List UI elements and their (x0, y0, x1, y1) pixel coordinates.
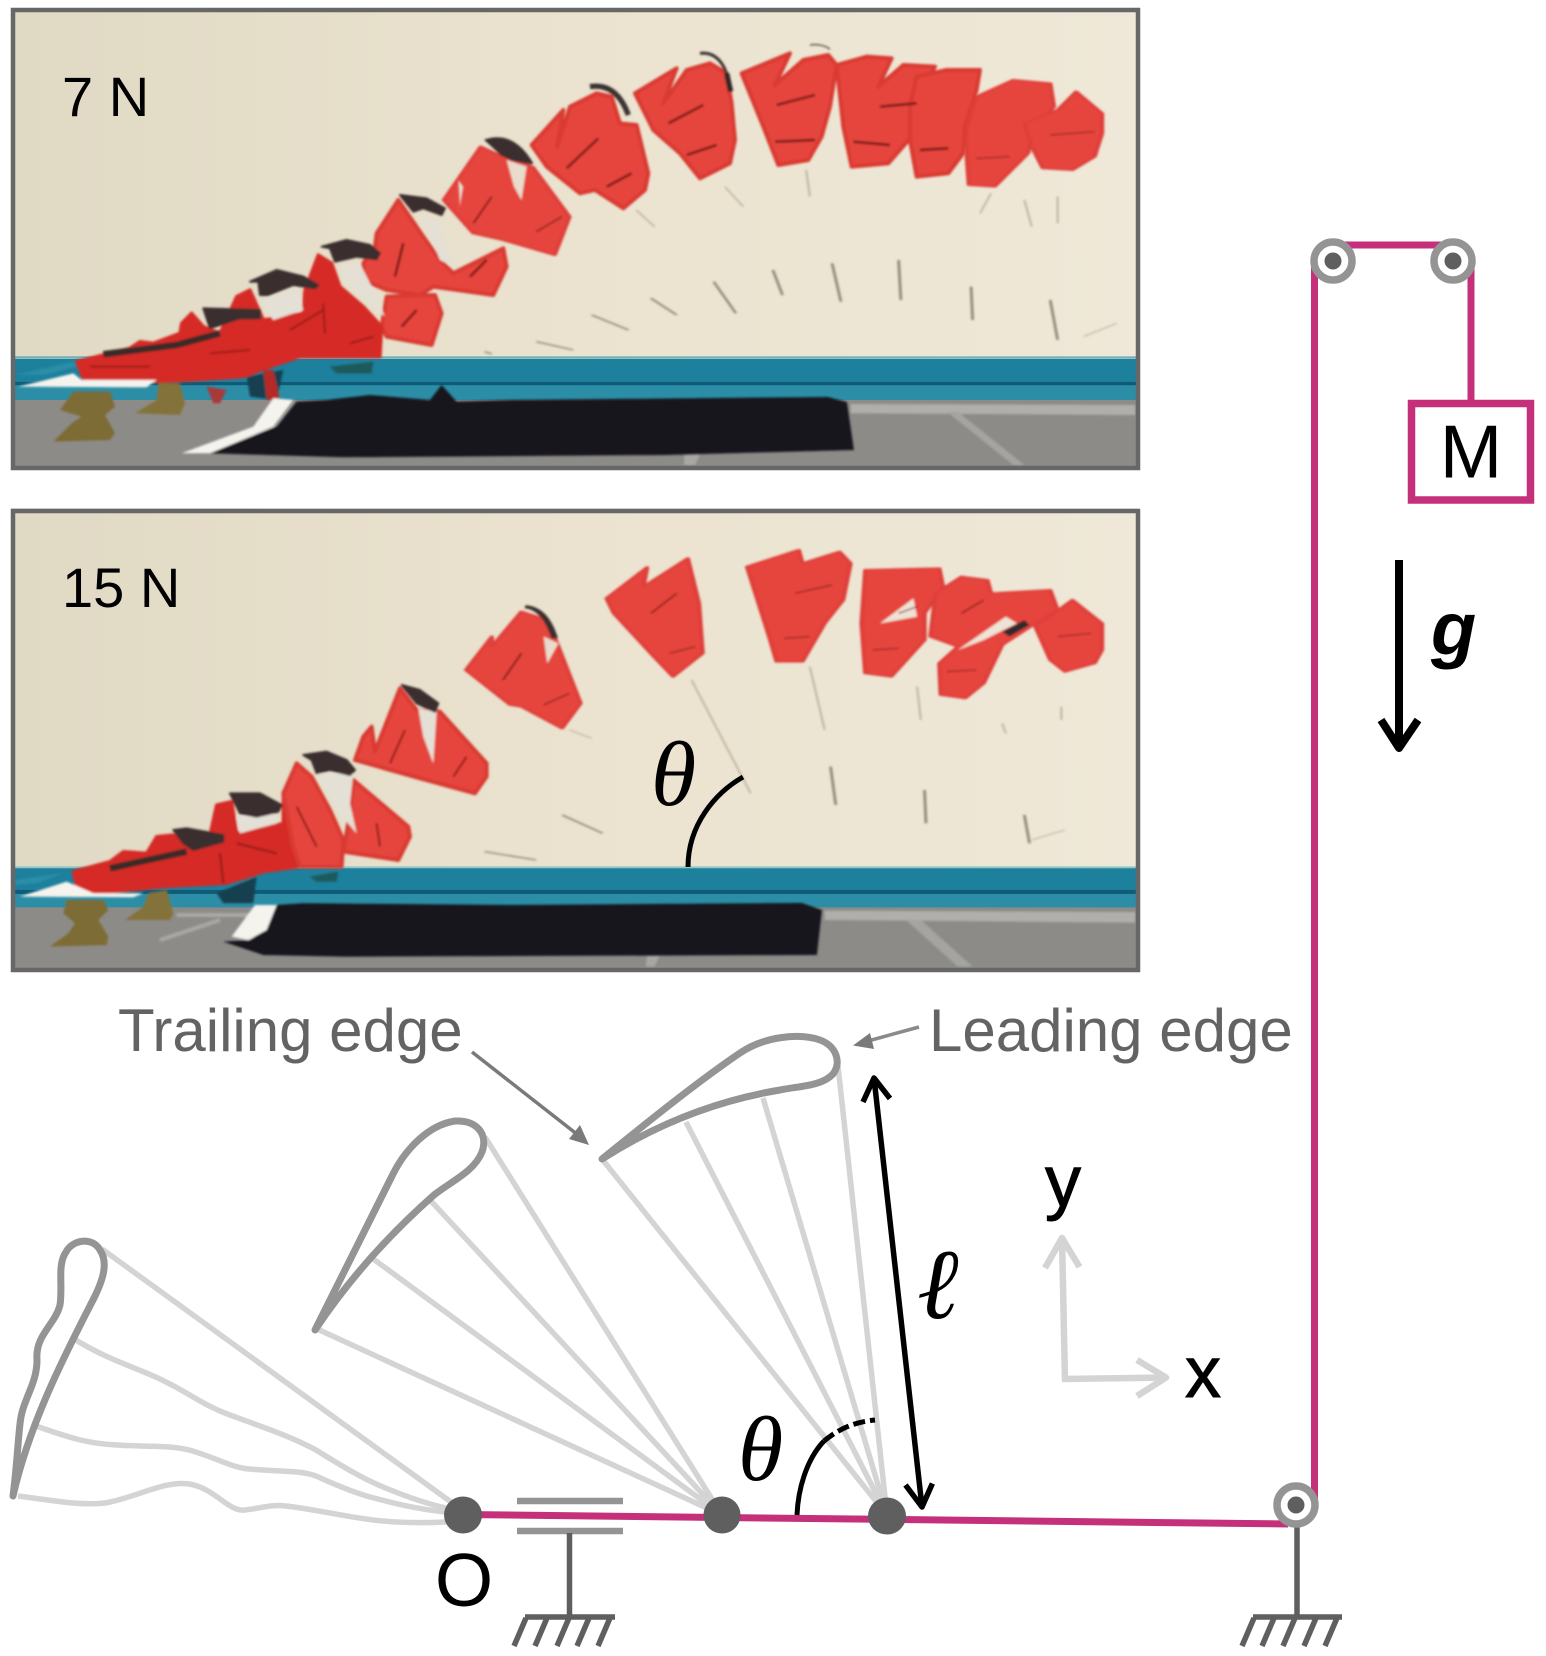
magenta beam (463, 1514, 1288, 1524)
wing pose 1: deformed (13, 1241, 451, 1523)
scribbles (503, 585, 1091, 705)
upper wings (532, 93, 648, 208)
gaps (317, 773, 357, 833)
label: gravity g: g (1430, 587, 1476, 670)
label: O: O (435, 1538, 493, 1622)
label: y axis: y (1045, 1142, 1081, 1222)
label: x axis: x (1185, 1333, 1221, 1413)
joint right (868, 1498, 906, 1534)
label: leading edge: Leading edge (929, 997, 1293, 1064)
far right wings (965, 80, 1054, 187)
angle arc on photo (688, 777, 743, 867)
angle arc (797, 1420, 875, 1515)
hats (303, 752, 355, 775)
streaks (484, 767, 1030, 860)
panel: 7 N photo (11, 8, 1139, 470)
wing pose 3 (602, 1036, 887, 1515)
mass box M (1412, 404, 1530, 500)
cloth (223, 903, 822, 957)
arrow: leading edge (853, 1027, 919, 1049)
axes arrows (1045, 1238, 1166, 1396)
pulley: top right (1434, 242, 1472, 280)
under wing shadows (217, 877, 257, 903)
wing 7 (355, 688, 487, 793)
wings (466, 612, 581, 728)
rods (160, 915, 250, 940)
red lines (395, 243, 487, 327)
wing pose 2 (315, 1121, 722, 1515)
lower wing cluster (77, 255, 382, 383)
mass box M: M (1440, 410, 1502, 494)
lower wing cluster (73, 763, 343, 893)
photo frame: 15 N (13, 511, 1138, 970)
label: theta: θ (738, 1398, 783, 1500)
wing 9 (363, 200, 507, 295)
gaps (260, 288, 303, 320)
arrow: gravity (1381, 560, 1418, 748)
hats (250, 270, 318, 295)
arrow: trailing edge (472, 1052, 589, 1145)
paper (232, 905, 277, 940)
legs (53, 392, 115, 442)
label: trailing edge: Trailing edge (118, 997, 463, 1064)
paper (182, 398, 293, 453)
joint O (444, 1496, 482, 1534)
legs (50, 900, 108, 947)
joint middle (704, 1496, 740, 1534)
magenta cable (1314, 245, 1471, 1500)
wing 8 (444, 147, 569, 255)
wing 10 rear (382, 295, 442, 345)
panel: 15 N photo (11, 508, 1139, 972)
white gaps and hats (544, 637, 558, 663)
cloth (210, 385, 854, 457)
label: theta on photo: θ (651, 723, 696, 825)
label: 15 N: 15 N (62, 556, 180, 619)
damper (514, 1501, 623, 1646)
platform (18, 373, 157, 387)
photo frame: 7 N (13, 10, 1138, 468)
under wing shadows (247, 370, 283, 400)
platform (20, 882, 143, 897)
label: length l: ℓ (917, 1229, 959, 1340)
label: 7 N: 7 N (62, 65, 149, 128)
pulley: beam end (1277, 1486, 1315, 1524)
arrow: length (863, 1078, 932, 1507)
wing 8 rear (343, 780, 410, 860)
pulley: top left (1314, 242, 1352, 280)
support: right ground (1242, 1527, 1342, 1646)
